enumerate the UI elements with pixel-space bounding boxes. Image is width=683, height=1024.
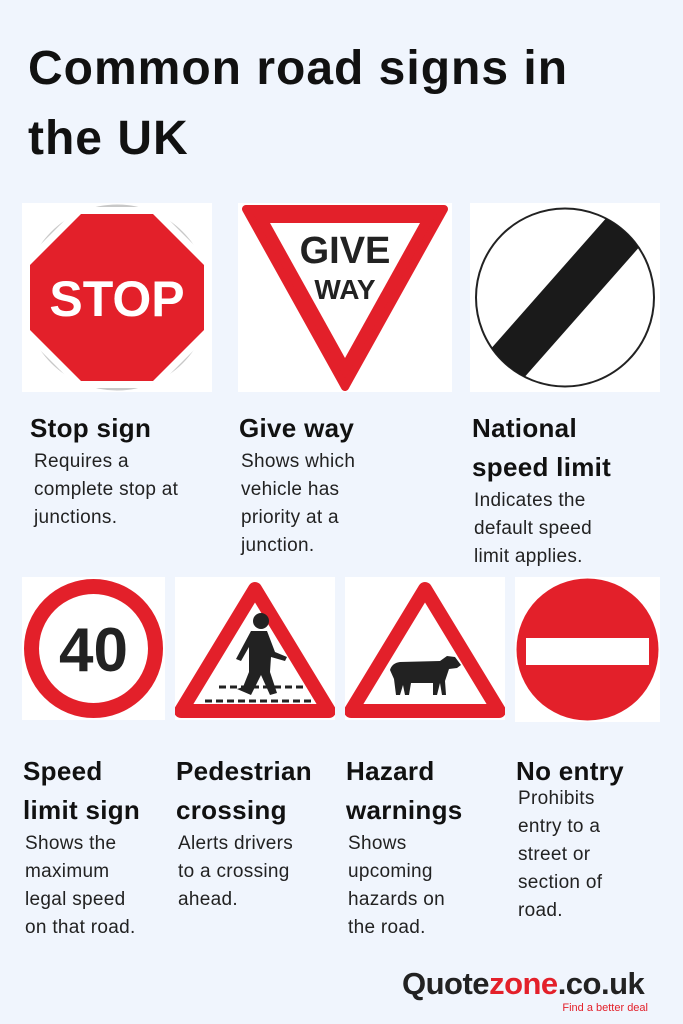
text: pedestrian (176, 756, 312, 910)
panel: stop sign: STOP (49, 271, 185, 327)
text: no entry: Prohibits entry to a street or section of road. (518, 788, 602, 921)
panel: give way (238, 203, 452, 392)
logo: Quotezone.co.uk (402, 966, 644, 1001)
panel: speed limit: 40 (59, 616, 128, 685)
panel: hazard warnings (345, 577, 505, 720)
text: pedestrian: Pedestrian crossing (176, 756, 312, 825)
logo: Find a better deal (562, 1002, 648, 1014)
text: stop sign: Requires a complete stop at junctions. (34, 451, 178, 528)
panel: no entry (515, 577, 660, 722)
panel: stop sign (22, 203, 212, 392)
text: stop sign (30, 413, 178, 528)
panel: pedestrian crossing (175, 577, 335, 720)
text: no entry: No entry (516, 756, 624, 786)
panel: speed limit (22, 577, 165, 720)
text: national speed limit: Indicates the default speed limit applies. (474, 490, 592, 567)
panel: give way: GIVE (300, 230, 390, 272)
text: national speed limit (472, 413, 611, 567)
text: pedestrian: Alerts drivers to a crossing ahead. (178, 833, 293, 910)
text: speed limit: Shows the maximum legal speed on that road. (25, 833, 136, 938)
text: national speed limit: National speed limit (472, 413, 611, 482)
title: Common road signs in the UK (28, 42, 568, 165)
text: no entry (516, 756, 624, 921)
panel: give way: WAY (314, 274, 376, 305)
text: give way: Shows which vehicle has priority at a junction. (241, 451, 355, 556)
text: speed limit (23, 756, 140, 938)
text: hazard: Hazard warnings (346, 756, 463, 825)
text: hazard (346, 756, 463, 938)
text: give way: Give way (239, 413, 354, 443)
text: stop sign: Stop sign (30, 413, 151, 443)
text: speed limit: Speed limit sign (23, 756, 140, 825)
text: hazard: Shows upcoming hazards on the road. (348, 833, 445, 938)
panel: national speed limit (470, 203, 660, 392)
